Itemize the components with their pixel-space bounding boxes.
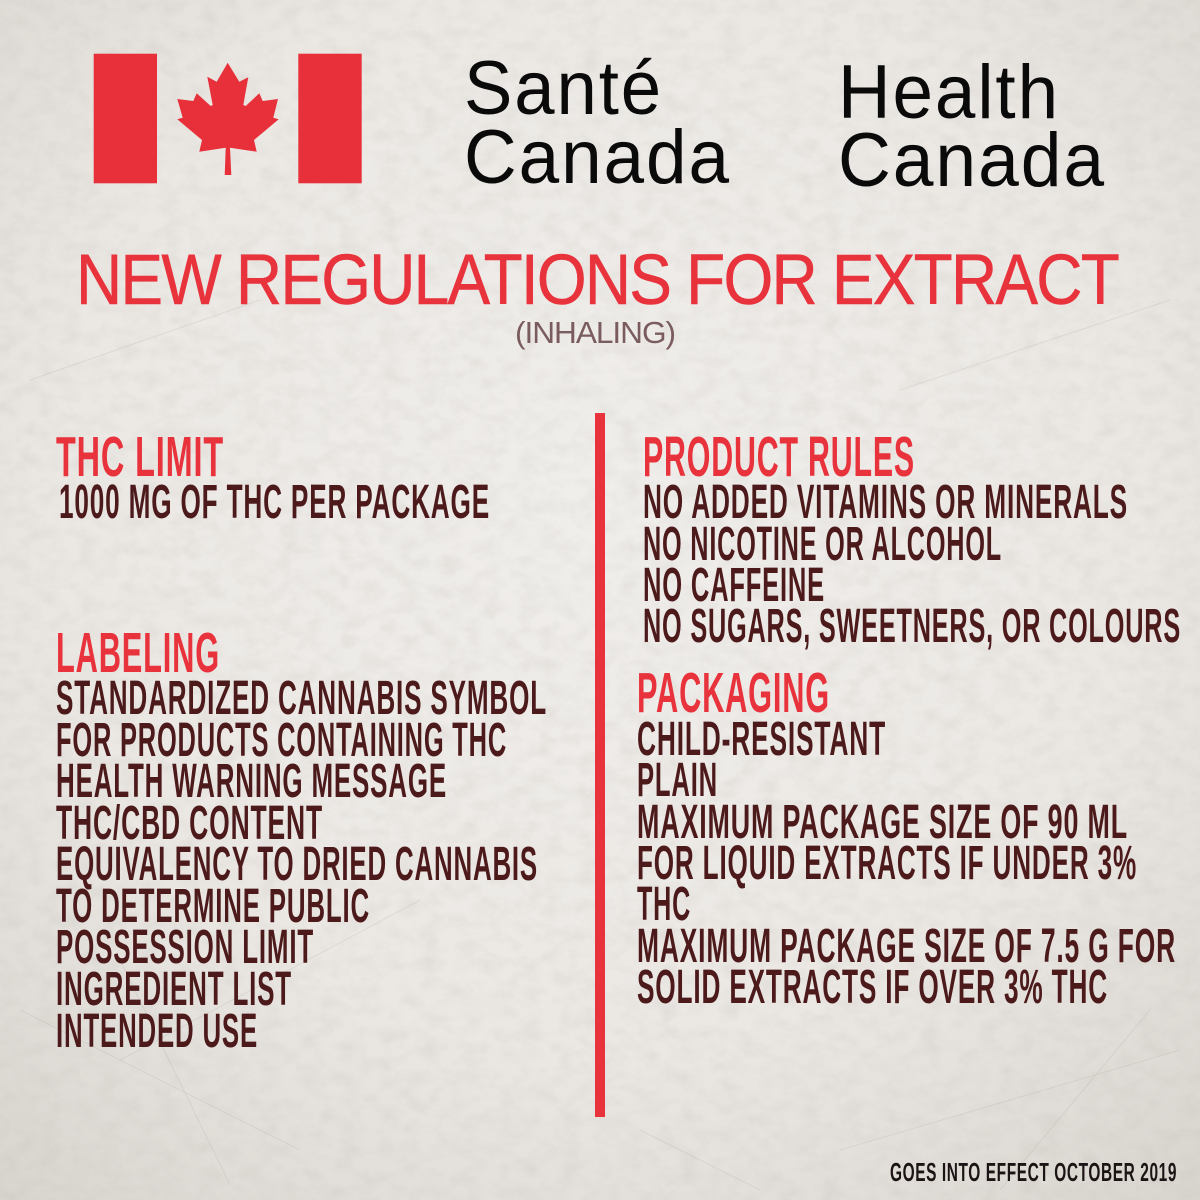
text: packaging requirements: [637, 713, 1176, 1014]
text: labeling requirements: POSSESSION LIMIT: [56, 921, 314, 974]
text: labeling requirements: INGREDIENT LIST: [56, 963, 292, 1016]
logo wordmark: Santé Canada: Santé: [464, 46, 663, 131]
text: packaging requirements: THC: [637, 878, 691, 931]
panel: packaging: [637, 661, 1176, 1014]
text: product rules list: NO CAFFEINE: [643, 559, 825, 612]
logo wordmark: Health Canada: Canada: [838, 118, 1106, 203]
subtitle: (INHALING): [515, 316, 675, 350]
title: NEW REGULATIONS FOR EXTRACT: [76, 241, 1119, 320]
logo wordmark: Santé Canada: Canada: [464, 115, 731, 200]
text: labeling requirements: FOR PRODUCTS CONTAINING THC: [56, 714, 507, 767]
heading: product rules: PRODUCT RULES: [643, 425, 915, 489]
text: labeling requirements: THC/CBD CONTENT: [56, 797, 323, 850]
text: product rules list: [643, 476, 1181, 653]
text: labeling requirements: [56, 672, 547, 1058]
heading: labeling: LABELING: [56, 621, 220, 685]
panel: labeling: [56, 621, 547, 1058]
text: labeling requirements: EQUIVALENCY TO DRIED CANNABIS: [56, 838, 538, 891]
logo wordmark: Santé Canada: [464, 46, 731, 200]
text: labeling requirements: STANDARDIZED CANNABIS SYMBOL: [56, 672, 547, 725]
panel: THC limit: [56, 425, 490, 529]
heading: THC limit: THC LIMIT: [56, 425, 224, 489]
text: THC limit details: 1000 MG OF THC PER PACKAGE: [59, 476, 490, 529]
heading: packaging: PACKAGING: [637, 661, 830, 725]
column divider: [595, 413, 605, 1117]
text: packaging requirements: PLAIN: [637, 754, 718, 807]
icon: Canadian flag: [94, 54, 362, 183]
logo wordmark: Health Canada: [838, 50, 1106, 203]
text: labeling requirements: HEALTH WARNING MESSAGE: [56, 755, 447, 808]
panel: product rules: [643, 425, 1181, 653]
text: labeling requirements: TO DETERMINE PUBLIC: [56, 880, 370, 933]
text: labeling requirements: INTENDED USE: [56, 1005, 258, 1058]
text: packaging requirements: CHILD-RESISTANT: [637, 713, 886, 766]
logo wordmark: Health Canada: Health: [838, 50, 1060, 135]
